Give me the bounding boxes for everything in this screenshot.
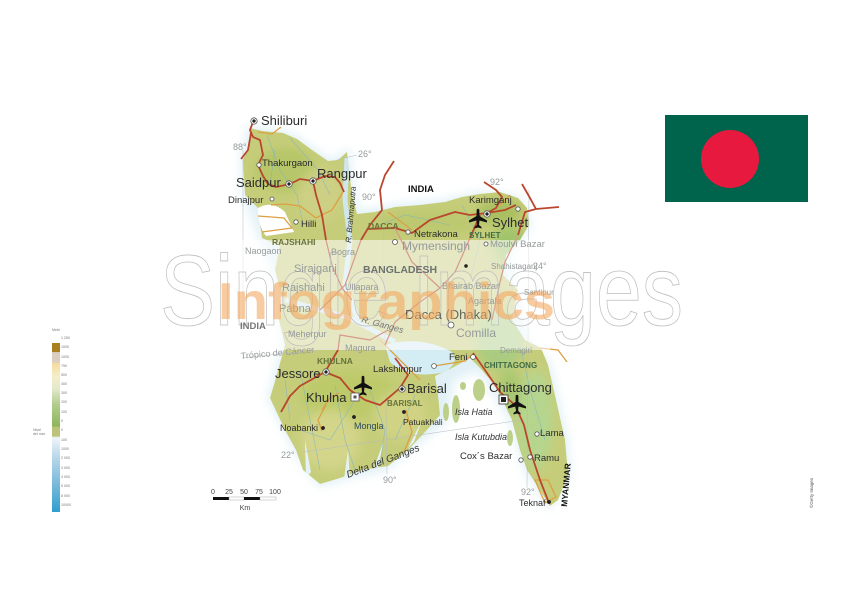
watermark: outlined text: Single Images xyxy=(160,235,683,347)
city labels: Dacca (Dhaka) xyxy=(405,307,492,322)
city labels: Comilla xyxy=(456,326,496,340)
region labels: BANGLADESH xyxy=(363,264,437,276)
region labels: RAJSHAHI xyxy=(272,237,315,247)
islands xyxy=(443,379,513,446)
icon: airplane Khulna xyxy=(354,376,372,396)
city labels: Rajshahi xyxy=(282,282,325,294)
legend labels: 5 000 xyxy=(61,484,70,488)
city labels: Moulvi Bazar xyxy=(490,239,545,250)
city labels: Patuakhali xyxy=(403,417,443,427)
roads in the pale band xyxy=(320,228,518,350)
legend labels: 8 000 xyxy=(61,494,70,498)
scale bar: 25 xyxy=(225,489,233,496)
legend labels: 0 xyxy=(61,419,63,423)
city labels: Noabanki xyxy=(280,423,318,433)
city labels: Ramu xyxy=(534,453,559,464)
copyright note: ©Getty Images xyxy=(808,477,814,508)
city labels: Jessore xyxy=(275,366,321,381)
city labels: Bhairab Bazar xyxy=(442,281,499,291)
scale bar: 50 xyxy=(240,489,248,496)
city labels: Magura xyxy=(345,343,376,353)
legend labels xyxy=(33,328,71,507)
graticule labels xyxy=(233,142,547,497)
city labels: Karimganj xyxy=(469,195,512,206)
city labels: Santipur xyxy=(524,288,554,297)
geographic labels: Isla Hatia xyxy=(455,407,493,417)
geographic labels: R. Ganges xyxy=(360,314,405,335)
scale bar: Km xyxy=(240,505,250,512)
pale overlay band xyxy=(240,240,550,350)
region labels: INDIA xyxy=(240,321,266,332)
icon: airplane Chittagong xyxy=(508,395,526,414)
legend labels: 200 xyxy=(61,400,67,404)
city labels: Saidpur xyxy=(236,175,281,190)
legend labels: 750 xyxy=(61,364,67,368)
graticule labels: 90° xyxy=(383,475,397,485)
graticule labels: 90° xyxy=(362,192,376,202)
legend labels: del mar xyxy=(33,432,46,436)
legend labels: 1000 xyxy=(61,355,69,359)
graticule labels: 22° xyxy=(281,450,295,460)
graticule labels: 26° xyxy=(358,149,372,159)
rivers xyxy=(267,135,545,470)
scale bar: 75 xyxy=(255,489,263,496)
legend labels: Nivel xyxy=(33,428,41,432)
elevation legend xyxy=(33,328,71,512)
city labels: Mongla xyxy=(354,421,384,431)
southern inlets xyxy=(305,420,422,479)
icon: airplane Sylhet xyxy=(469,209,487,228)
map of Bangladesh xyxy=(235,120,575,515)
scale bar: 0 xyxy=(211,489,215,496)
land xyxy=(235,120,575,515)
Notch of Indian territory xyxy=(258,205,294,236)
graticule labels: 88° xyxy=(233,142,247,152)
geographic labels: R. Brahmaputra xyxy=(344,186,358,243)
city labels: Pabna xyxy=(279,303,312,315)
city labels xyxy=(228,113,564,508)
city labels: Sirajganj xyxy=(294,263,337,275)
legend labels: 300 xyxy=(61,391,67,395)
city labels: Chittagong xyxy=(489,380,552,395)
city labels: Feni xyxy=(449,352,467,363)
graticule labels: 92° xyxy=(490,177,504,187)
legend labels: 100 xyxy=(61,438,67,442)
city labels: Shiliburi xyxy=(261,113,307,128)
city labels: Lakshimpur xyxy=(373,364,422,375)
coastal glow xyxy=(243,128,568,506)
city labels: Demagiri xyxy=(500,346,532,355)
city labels: Netrakona xyxy=(414,229,459,240)
city markers xyxy=(251,118,551,504)
geographic labels xyxy=(240,186,507,481)
legend labels: 500 xyxy=(61,373,67,377)
orange roads xyxy=(258,127,567,503)
city labels: Shahistaganj xyxy=(491,262,537,271)
city labels: Naogaon xyxy=(245,246,282,256)
geographic labels: Isla Kutubdia xyxy=(455,432,507,442)
estuary xyxy=(385,341,455,374)
scale bar: 100 xyxy=(269,489,281,496)
region labels: SYLHET xyxy=(469,231,501,240)
river Brahmaputra xyxy=(345,158,358,320)
legend labels: 10000 xyxy=(61,503,71,507)
city labels: Bogra xyxy=(331,247,355,257)
city labels: Rangpur xyxy=(317,166,368,181)
red roads xyxy=(241,122,559,503)
region labels: MYANMAR xyxy=(559,463,573,507)
region labels: KHULNA xyxy=(317,356,353,366)
city labels: Barisal xyxy=(407,381,447,396)
city labels: Cox´s Bazar xyxy=(460,451,512,462)
city labels: Ullapara xyxy=(345,282,379,292)
geographic labels: Trópico de Cáncer xyxy=(240,345,315,361)
legend labels: 1000 xyxy=(61,345,69,349)
legend labels: 1 250 xyxy=(61,336,70,340)
scale bar xyxy=(211,489,281,512)
graticule labels: 24° xyxy=(533,261,547,271)
region labels: INDIA xyxy=(408,184,434,195)
legend labels: 2 000 xyxy=(61,456,70,460)
river Ganges xyxy=(285,300,395,342)
city labels: Dinajpur xyxy=(228,195,263,206)
legend labels: 400 xyxy=(61,382,67,386)
legend labels: 1000 xyxy=(61,447,69,451)
legend labels: 3 000 xyxy=(61,466,70,470)
region labels xyxy=(240,184,573,507)
city labels: Mymensingh xyxy=(402,239,470,253)
watermark: orange text: Infographics xyxy=(218,273,555,331)
city labels: Agartala xyxy=(468,296,502,306)
city labels: Sylhet xyxy=(492,215,529,230)
flag of Bangladesh xyxy=(665,115,808,202)
graticule xyxy=(242,150,530,488)
city labels: Lama xyxy=(540,428,564,439)
graticule labels: 92° xyxy=(521,487,535,497)
region labels: CHITTAGONG xyxy=(484,361,537,370)
region labels: DACCA xyxy=(368,221,399,231)
legend labels: Metri xyxy=(52,328,60,332)
region labels: BARISAL xyxy=(387,399,423,408)
city labels: Meherpur xyxy=(288,329,327,339)
city labels: Teknaf xyxy=(519,498,546,508)
city labels: Thakurgaon xyxy=(262,158,313,169)
geographic labels: Delta del Ganges xyxy=(345,443,421,481)
city labels: Khulna xyxy=(306,390,347,405)
city labels: Hilli xyxy=(301,219,316,230)
icon: Chittagong port xyxy=(499,395,508,404)
icon: Khulna port xyxy=(351,393,359,401)
legend labels: 100 xyxy=(61,410,67,414)
legend labels: 0 xyxy=(61,428,63,432)
legend labels: 4 000 xyxy=(61,475,70,479)
